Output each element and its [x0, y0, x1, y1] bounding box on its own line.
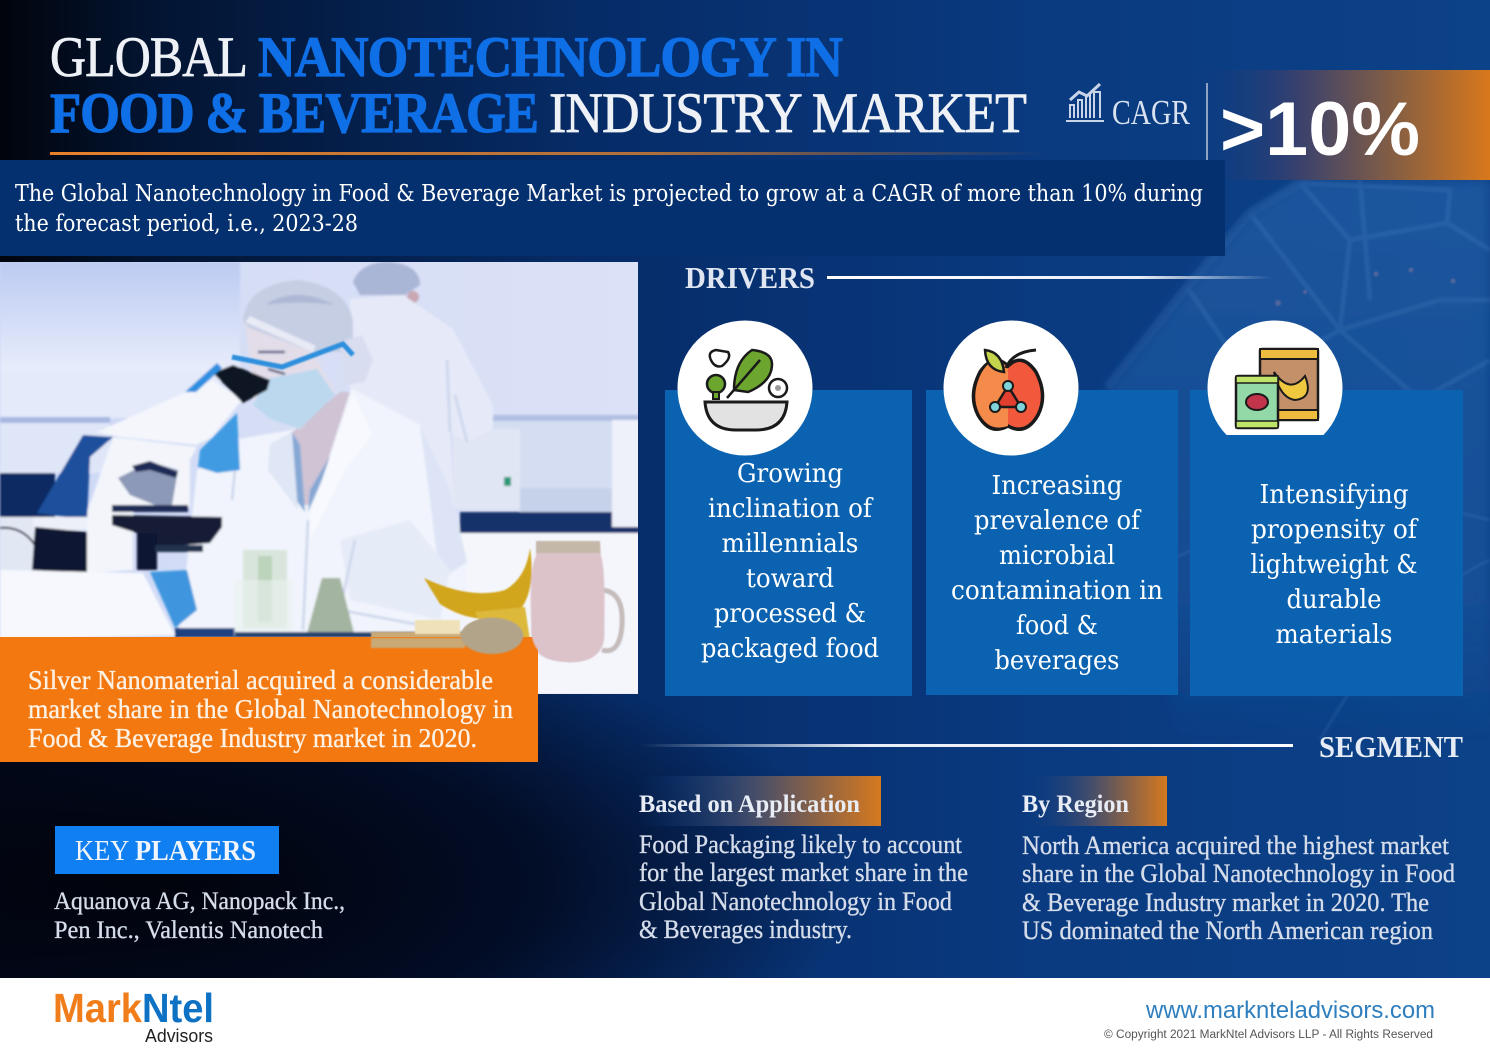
title line 1 [50, 26, 843, 89]
summary band: the forecast period, i.e., 2023-28 [15, 211, 358, 237]
key players: Pen Inc., Valentis Nanotech [54, 917, 323, 944]
footer [0, 978, 1490, 1056]
segment: by region [1022, 776, 1455, 945]
driver text 2: microbial [999, 541, 1115, 571]
food overlapping callout [371, 618, 604, 662]
summary band [0, 160, 1225, 256]
segment: by region: North America acquired the highest market [1022, 831, 1450, 860]
driver text 1: packaged food [701, 634, 879, 664]
segment heading [640, 729, 1463, 764]
gloves [198, 413, 240, 473]
title line 2 [50, 82, 1026, 145]
drivers heading [685, 260, 1272, 295]
driver text 2: beverages [994, 646, 1120, 676]
driver text 2 [951, 471, 1163, 676]
segment: based on application: Global Nanotechnology in Food [639, 887, 952, 916]
goggles [232, 344, 353, 367]
microscope [97, 380, 242, 445]
title line 1: GLOBAL [50, 26, 247, 89]
logo: Advisors [145, 1026, 213, 1046]
orange callout [0, 637, 538, 762]
segment: by region: By Region [1022, 791, 1129, 818]
glassware [243, 550, 287, 628]
segment: based on application: for the largest market share in the [639, 858, 968, 887]
copyright: © Copyright 2021 MarkNtel Advisors LLP - All Rights Reserved [1104, 1029, 1433, 1041]
cutting board [370, 631, 462, 637]
driver text 2: contamination in [951, 576, 1163, 606]
segment: by region: & Beverage Industry market in 2020. The [1022, 888, 1429, 917]
smoothie jar [600, 590, 622, 651]
driver text 2: prevalence of [974, 506, 1142, 536]
head [246, 326, 333, 400]
driver text 1 [701, 459, 879, 664]
driver text 2: food & [1016, 611, 1098, 641]
orange callout: market share in the Global Nanotechnology in [28, 694, 513, 724]
driver text 3: durable [1286, 585, 1382, 615]
logo [53, 985, 214, 1046]
logo: Ntel [142, 985, 214, 1031]
segment: by region: share in the Global Nanotechnology in Food [1022, 859, 1455, 888]
driver text 3: Intensifying [1260, 480, 1408, 510]
summary band: The Global Nanotechnology in Food & Beverage Market is projected to grow at a CAGR of more than 10% during [15, 181, 1203, 207]
segment: based on application: & Beverages industry. [639, 915, 852, 944]
driver card 1 [665, 320, 912, 696]
drivers heading: DRIVERS [685, 260, 815, 295]
orange callout: Silver Nanomaterial acquired a considerable [28, 665, 493, 695]
CAGR label: CAGR [1112, 93, 1191, 132]
photo: scientist at microscope [0, 262, 640, 694]
logo: Mark [53, 985, 142, 1031]
icon: salad bowl [678, 320, 812, 456]
lab coat [178, 389, 468, 640]
title line 1: NANOTECHNOLOGY IN [258, 26, 843, 89]
segment heading: SEGMENT [1319, 729, 1463, 764]
icon: apple [944, 320, 1078, 456]
website: www.marknteladvisors.com [1145, 997, 1435, 1024]
driver text 1: toward [746, 564, 834, 594]
icon: snack packets [1208, 320, 1342, 435]
driver text 3: materials [1276, 620, 1392, 650]
driver text 1: processed & [714, 599, 866, 629]
CAGR callout [1066, 70, 1490, 180]
icon: growth chart [1066, 84, 1104, 121]
orange callout: Food & Beverage Industry market in 2020. [28, 723, 477, 753]
segment: by region: US dominated the North American region [1022, 916, 1433, 945]
driver text 1: Growing [737, 459, 843, 489]
driver card 3 [1190, 320, 1463, 696]
lab background [0, 262, 240, 372]
title line 2: INDUSTRY MARKET [549, 82, 1026, 145]
segment: based on application [638, 776, 968, 944]
driver text 2: Increasing [992, 471, 1122, 501]
segment: based on application: Based on Application [639, 791, 860, 818]
bananas [424, 548, 532, 619]
driver text 3: lightweight & [1250, 550, 1418, 580]
driver text 1: inclination of [708, 494, 874, 524]
CAGR value: >10% [1220, 87, 1420, 172]
driver text 3: propensity of [1251, 515, 1419, 545]
oats bowl [462, 617, 524, 637]
key players [54, 826, 345, 944]
title [50, 26, 1026, 145]
title line 2: FOOD & BEVERAGE [50, 82, 538, 145]
back person [353, 262, 420, 295]
key players: Aquanova AG, Nanopack Inc., [54, 888, 345, 915]
key players: KEY PLAYERS [75, 835, 256, 867]
driver text 3 [1250, 480, 1419, 650]
segment: based on application: Food Packaging likely to account [639, 830, 963, 859]
driver card 2 [926, 320, 1178, 695]
driver text 1: millennials [722, 529, 858, 559]
